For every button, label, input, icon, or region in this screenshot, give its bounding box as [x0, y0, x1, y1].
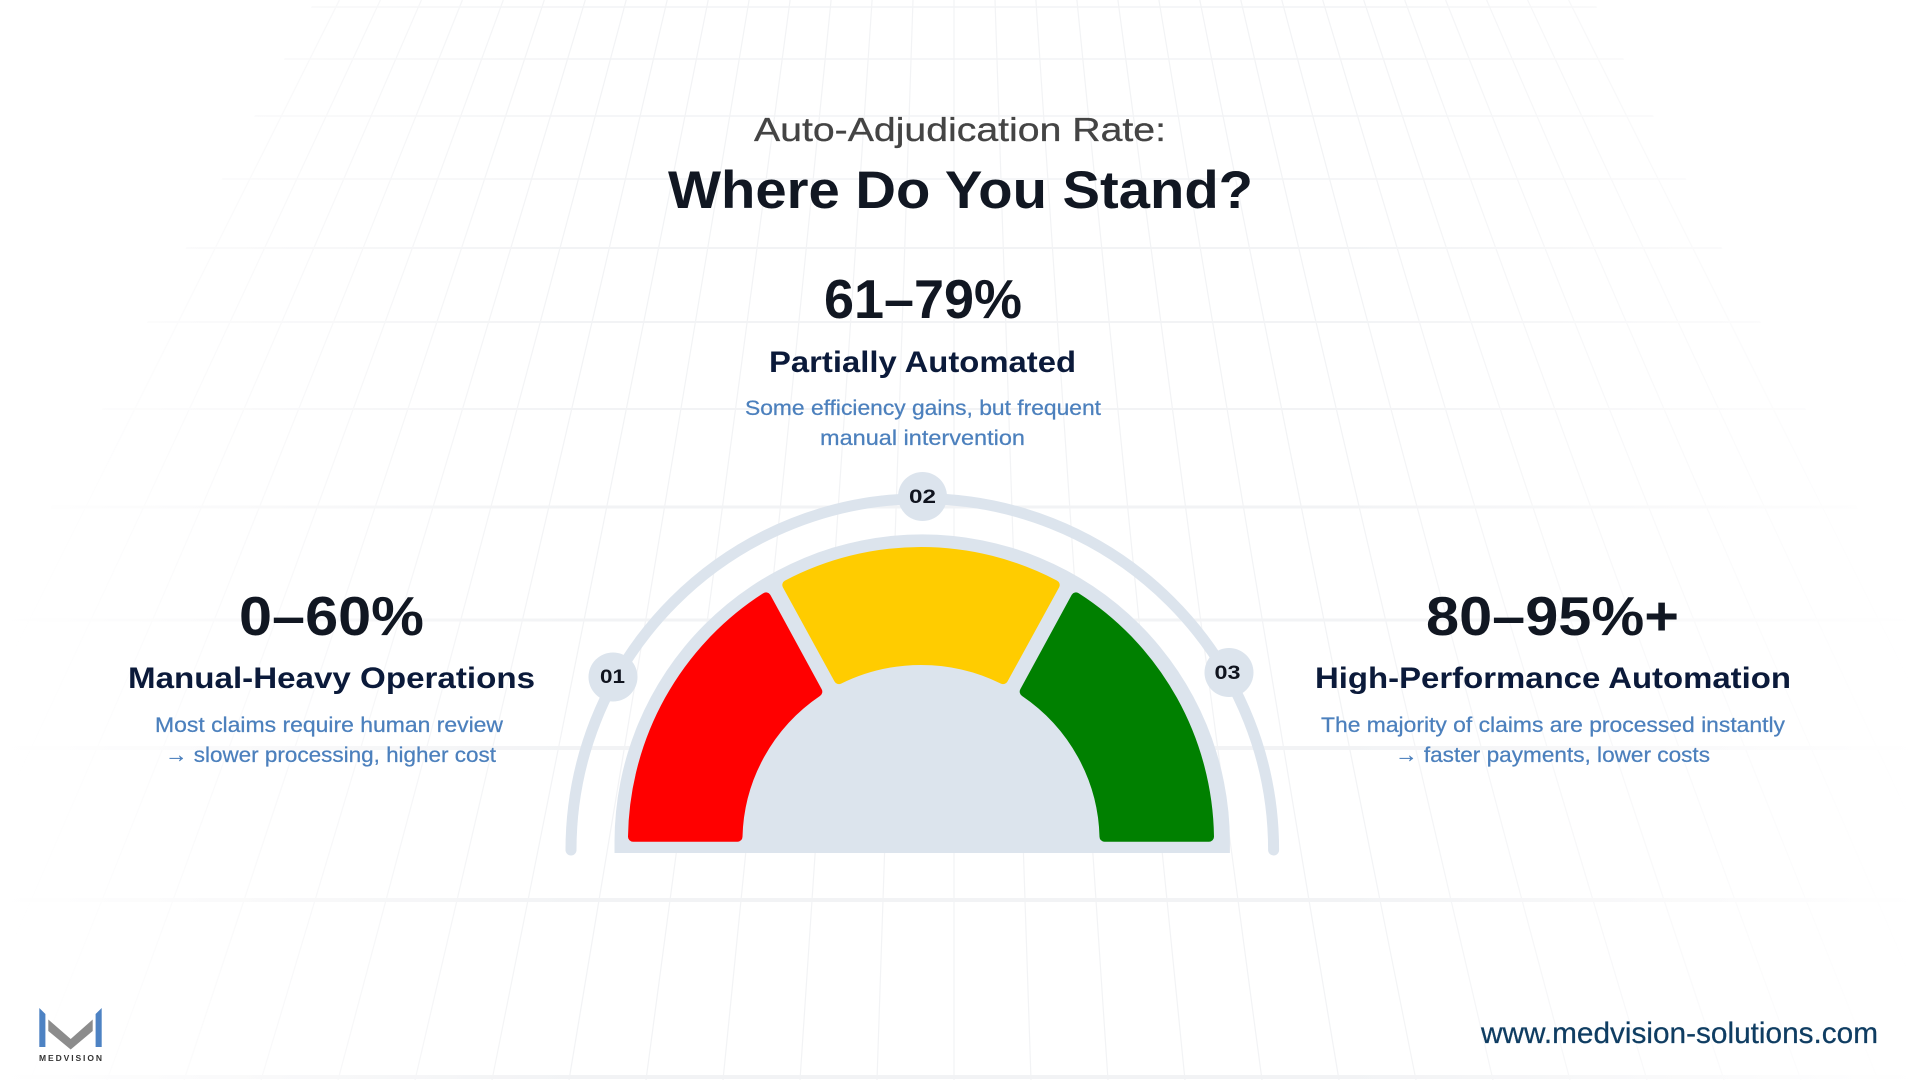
label: Manual-Heavy Operations	[128, 662, 535, 695]
subtitle: Auto-Adjudication Rate:	[754, 112, 1166, 149]
description: → slower processing, higher cost	[165, 743, 496, 767]
description	[745, 396, 1101, 450]
description: The majority of claims are processed instantly	[1321, 713, 1785, 737]
badge 02	[898, 472, 947, 521]
logo mark	[39, 1008, 102, 1050]
label: Partially Automated	[769, 346, 1076, 379]
range value 0–60%: 0–60%	[239, 585, 424, 647]
label: High-Performance Automation	[1315, 662, 1791, 695]
badge 03: 03	[1214, 662, 1241, 684]
panel: partially automated	[745, 268, 1101, 450]
gauge chart	[571, 472, 1274, 853]
green segment	[1025, 597, 1209, 837]
description	[1321, 713, 1785, 767]
description	[155, 713, 503, 767]
description: Some efficiency gains, but frequent	[745, 396, 1101, 420]
badge 03	[1204, 648, 1254, 697]
description: → faster payments, lower costs	[1395, 743, 1710, 767]
red segment	[633, 597, 817, 837]
description: Most claims require human review	[155, 713, 503, 737]
badge 01: 01	[600, 666, 625, 688]
panel: high-performance automation	[1315, 585, 1791, 767]
yellow segment	[787, 552, 1055, 679]
badge 01	[588, 652, 638, 702]
title: Where Do You Stand?	[668, 161, 1253, 220]
logo: MedVision	[39, 1008, 102, 1063]
logo wordmark: MEDVISION	[39, 1053, 102, 1063]
panel: manual-heavy operations	[128, 585, 535, 767]
range value 61–79%: 61–79%	[824, 268, 1022, 330]
description: manual intervention	[820, 426, 1025, 450]
outer thin arc	[571, 499, 1274, 850]
badge 02: 02	[909, 486, 936, 508]
range value 80–95%+: 80–95%+	[1426, 585, 1679, 647]
website url: www.medvision-solutions.com	[1480, 1017, 1878, 1050]
gauge base dome	[614, 534, 1230, 853]
